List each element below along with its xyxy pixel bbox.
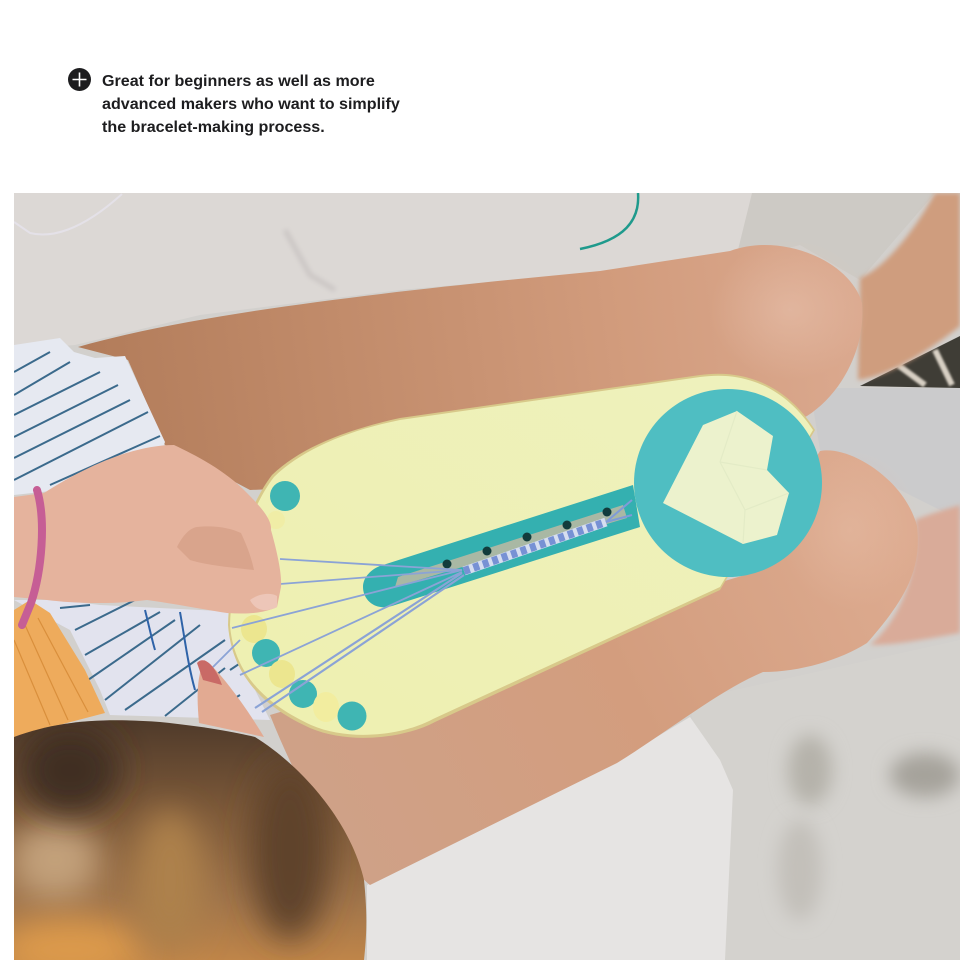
teal disc with heart: [634, 389, 822, 577]
bracelet band: [464, 522, 606, 571]
bracelet maker board: [200, 374, 822, 738]
icon: plus bullet: [68, 68, 91, 91]
child's lower fingers: [198, 660, 264, 737]
pegs: [231, 481, 366, 730]
photo illustration: child using bracelet maker on lap: [14, 193, 960, 960]
thread on cushion: [14, 194, 122, 235]
lower leg: [270, 450, 918, 885]
background: sofa cushions and floor: [14, 193, 960, 960]
text block: benefit statement: [102, 72, 400, 136]
far arm: [858, 193, 960, 380]
white cushion front: [367, 717, 733, 960]
threads: [200, 556, 464, 712]
text block: benefit statement: advanced makers who want to simplify: [102, 95, 400, 113]
green thread: [580, 193, 638, 249]
striped shorts: [14, 338, 270, 720]
text block: benefit statement: Great for beginners as well as more: [102, 72, 375, 90]
text block: benefit statement: the bracelet-making process.: [102, 118, 325, 136]
orange fabric: [14, 600, 105, 737]
child's hair: [0, 720, 366, 960]
far foot: [870, 505, 960, 645]
upper leg: [78, 245, 862, 490]
friendship bracelet: [22, 490, 42, 625]
teal slot: [363, 485, 640, 607]
child's hand with bracelet: [14, 445, 281, 737]
